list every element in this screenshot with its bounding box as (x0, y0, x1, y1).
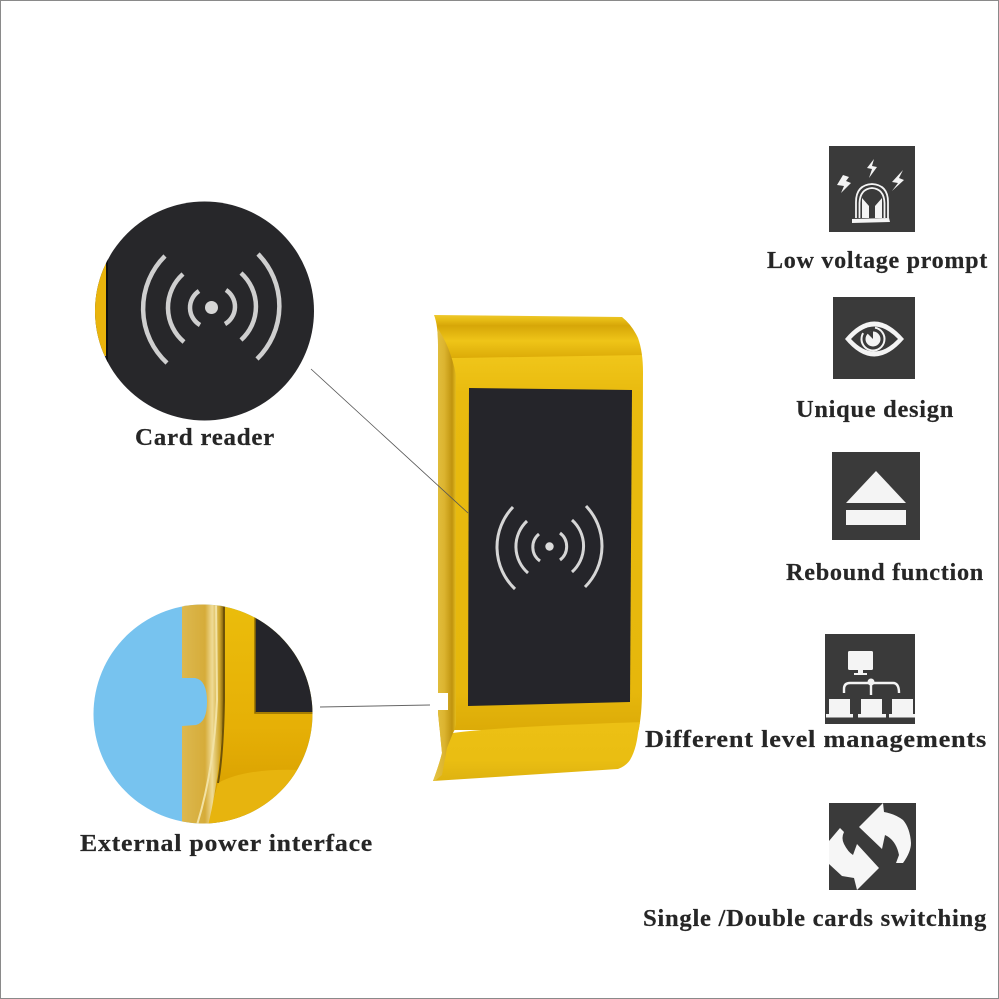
black card reader panel (468, 388, 632, 706)
label: rebound function: Rebound function (786, 560, 984, 586)
icon: eye (833, 297, 915, 379)
label: single / double cards switching: Single /Double cards switching (643, 906, 987, 932)
leader line: card reader (311, 369, 468, 513)
lock top band (434, 315, 642, 358)
panel wave symbol (497, 506, 602, 589)
black panel corner (255, 618, 312, 712)
wave symbol (143, 254, 279, 363)
gold front face (206, 606, 312, 824)
label: card reader: Card reader (135, 425, 275, 451)
icon: level management network (825, 634, 915, 724)
circle detail: external power interface (90, 600, 320, 830)
yellow edge (95, 264, 106, 356)
dark crease (218, 600, 224, 783)
icon: low voltage alarm (829, 146, 915, 232)
product: gold cabinet lock (430, 310, 645, 785)
icon: eject (832, 452, 920, 540)
circle detail: card reader (90, 195, 320, 425)
label: unique design: Unique design (796, 397, 954, 423)
label: external power interface: External power interface (80, 831, 373, 857)
lock left side strip (433, 327, 456, 781)
pale gold rim with notch (182, 600, 224, 830)
label: different level managements: Different level managements (645, 727, 987, 753)
lock bottom band (430, 722, 645, 785)
label: low voltage prompt: Low voltage prompt (767, 248, 988, 274)
leader line: external power interface (320, 705, 430, 707)
rim highlight (197, 600, 217, 825)
lower bright gold band (208, 770, 297, 824)
lock body (430, 355, 645, 730)
icon: card switching arrows (829, 803, 916, 890)
